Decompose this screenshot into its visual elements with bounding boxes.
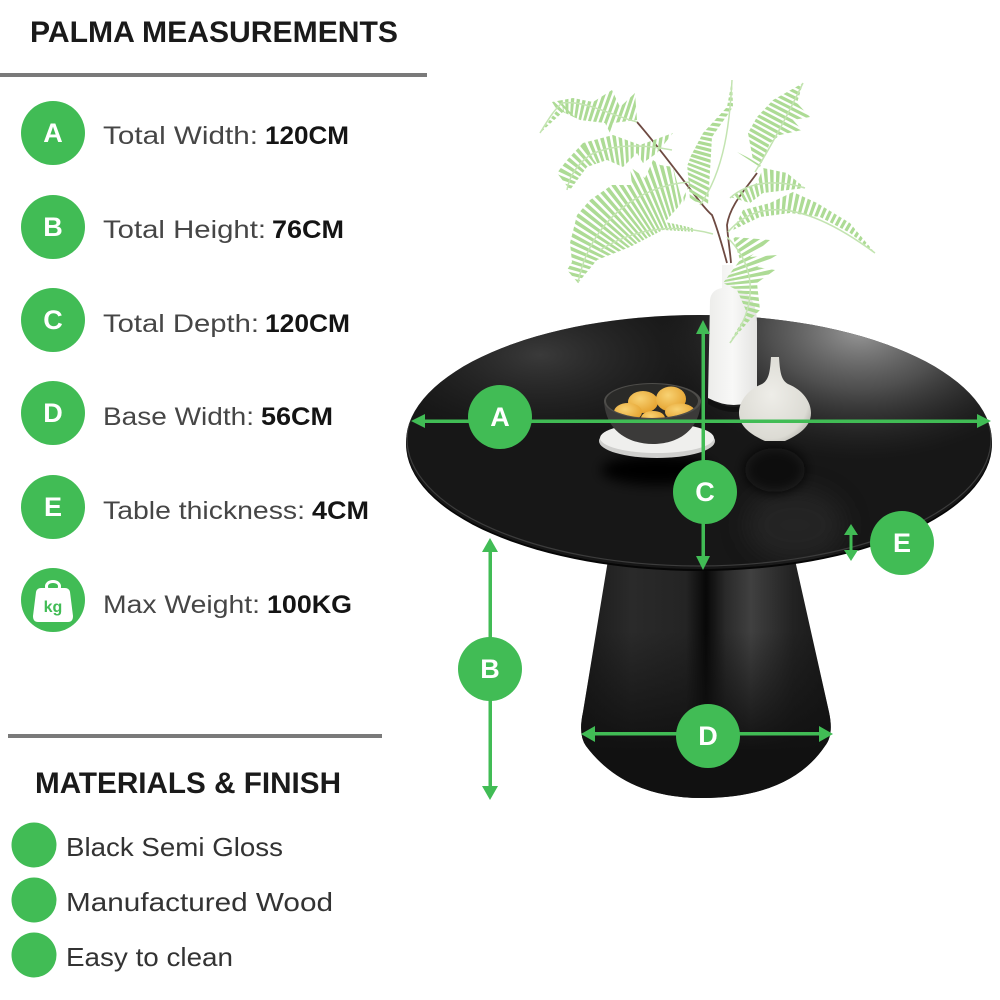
item: total width: A (43, 118, 63, 148)
item: base width: Base Width: (103, 403, 254, 431)
item: max weight: 100KG (267, 591, 352, 619)
arrow B: total height (458, 538, 522, 800)
icon: weight (33, 582, 73, 622)
panel: measurement list (21, 101, 369, 632)
arrow C: total depth: C (695, 477, 715, 507)
frond 3 (578, 182, 713, 283)
fern stems (637, 122, 757, 263)
bowl of lemons (604, 383, 701, 444)
frond 7 (730, 183, 805, 198)
arrow B: total height: B (480, 654, 500, 684)
item: black semi gloss: Black Semi Gloss (66, 832, 283, 862)
item: easy to clean: Easy to clean (66, 942, 233, 972)
item: max weight: Max Weight: (103, 591, 260, 619)
frond 1 (540, 103, 637, 133)
item: table thickness: E (44, 492, 62, 522)
frond 5 (755, 83, 803, 172)
object reflections (601, 448, 845, 561)
table base (581, 560, 831, 798)
panel: materials list (12, 822, 333, 978)
item: total depth (21, 288, 350, 352)
item: total width: 120CM (265, 122, 349, 150)
heading: materials and finish: MATERIALS & FINISH (35, 767, 341, 800)
bud vase (739, 357, 811, 441)
arrow E: table thickness: E (893, 528, 911, 558)
item: base width: D (43, 398, 63, 428)
item: total depth: C (43, 305, 63, 335)
item: max weight (21, 568, 352, 632)
item: easy to clean (12, 932, 233, 978)
item: total height: 76CM (272, 216, 344, 244)
arrow D: base width: D (698, 721, 718, 751)
arrow E: table thickness (844, 511, 934, 575)
table top (406, 315, 992, 571)
item: total depth: Total Depth: (103, 310, 259, 338)
icon: weight: kg (44, 599, 62, 616)
arrow A: total width (411, 385, 991, 449)
item: table thickness: Table thickness: (103, 497, 305, 525)
illustration: round pedestal table (380, 265, 1000, 798)
item: manufactured wood (12, 878, 333, 922)
frond 8 (727, 237, 750, 343)
title: Palma measurements: PALMA MEASUREMENTS (30, 16, 398, 49)
item: table thickness: 4CM (312, 497, 369, 525)
item: total width (21, 101, 349, 165)
frond 6 (728, 210, 875, 253)
item: black semi gloss (12, 822, 283, 868)
item: total height (21, 195, 344, 259)
arrow A: total width: A (490, 402, 510, 432)
item: manufactured wood: Manufactured Wood (66, 887, 333, 917)
frond 4 (700, 80, 732, 205)
arrow C: total depth (673, 320, 737, 570)
item: total depth: 120CM (265, 310, 350, 338)
item: table thickness (21, 475, 369, 539)
item: base width: 56CM (261, 403, 333, 431)
item: total height: Total Height: (103, 216, 266, 244)
item: total height: B (43, 212, 63, 242)
vase (708, 265, 757, 412)
item: base width (21, 381, 333, 445)
illustration: fern leaves (540, 80, 875, 343)
arrow D: base width (581, 704, 833, 768)
item: total width: Total Width: (103, 122, 258, 150)
plate (599, 423, 715, 458)
frond 2 (567, 146, 672, 190)
